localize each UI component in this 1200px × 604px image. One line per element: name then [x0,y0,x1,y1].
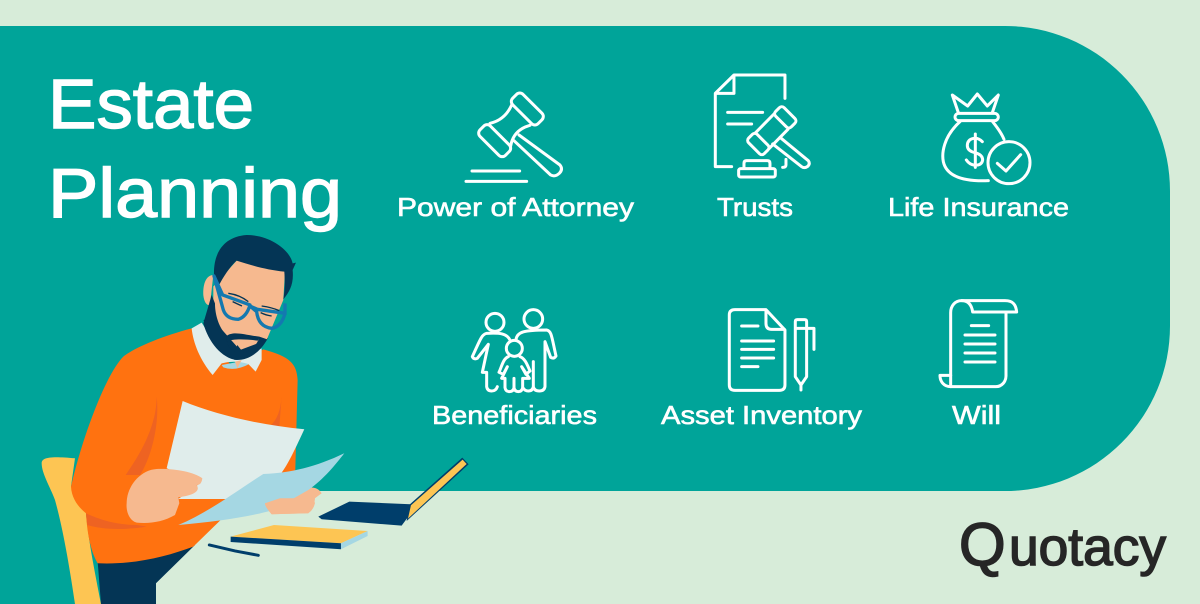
logo: Quotacy: uotacy [1009,518,1166,577]
glasses [214,276,285,328]
title [48,65,342,232]
icon: family [472,310,556,392]
collar [192,323,262,375]
chair [42,457,101,604]
title: Estate [48,65,254,143]
ear [203,275,213,305]
neck shadow [203,317,268,362]
blue paper [178,453,344,525]
trousers [98,545,195,604]
label: power of attorney: Power of Attorney [397,192,634,222]
icon: document and pen [729,310,814,390]
shirt [222,360,249,369]
neck [235,360,242,368]
pen [209,545,258,555]
hair [214,235,296,299]
icon: will scroll [940,301,1017,387]
right fingers [265,498,315,514]
logo: Quotacy [959,511,1166,578]
eyes and brows [228,293,279,316]
title: Planning [48,154,342,232]
label: asset inventory: Asset Inventory [661,400,862,430]
notebook [231,525,368,549]
sweater [71,328,298,564]
label: will: Will [952,400,1001,430]
icon: gavel [466,91,562,181]
label: trusts: Trusts [717,192,793,222]
label: life insurance: Life Insurance [888,192,1069,222]
illustration: man reading at desk [42,235,469,604]
white paper [167,401,304,499]
right hand [265,487,322,514]
label: beneficiaries: Beneficiaries [432,400,597,430]
face [213,261,285,350]
sweater shadows [86,397,282,529]
icon: money bag with check [943,94,1030,184]
desk surface [156,492,1005,604]
beard [203,295,267,360]
laptop [318,458,469,526]
left hand [127,469,202,523]
icon: document with gavel [715,75,809,177]
logo: Quotacy: Q [959,511,1006,578]
